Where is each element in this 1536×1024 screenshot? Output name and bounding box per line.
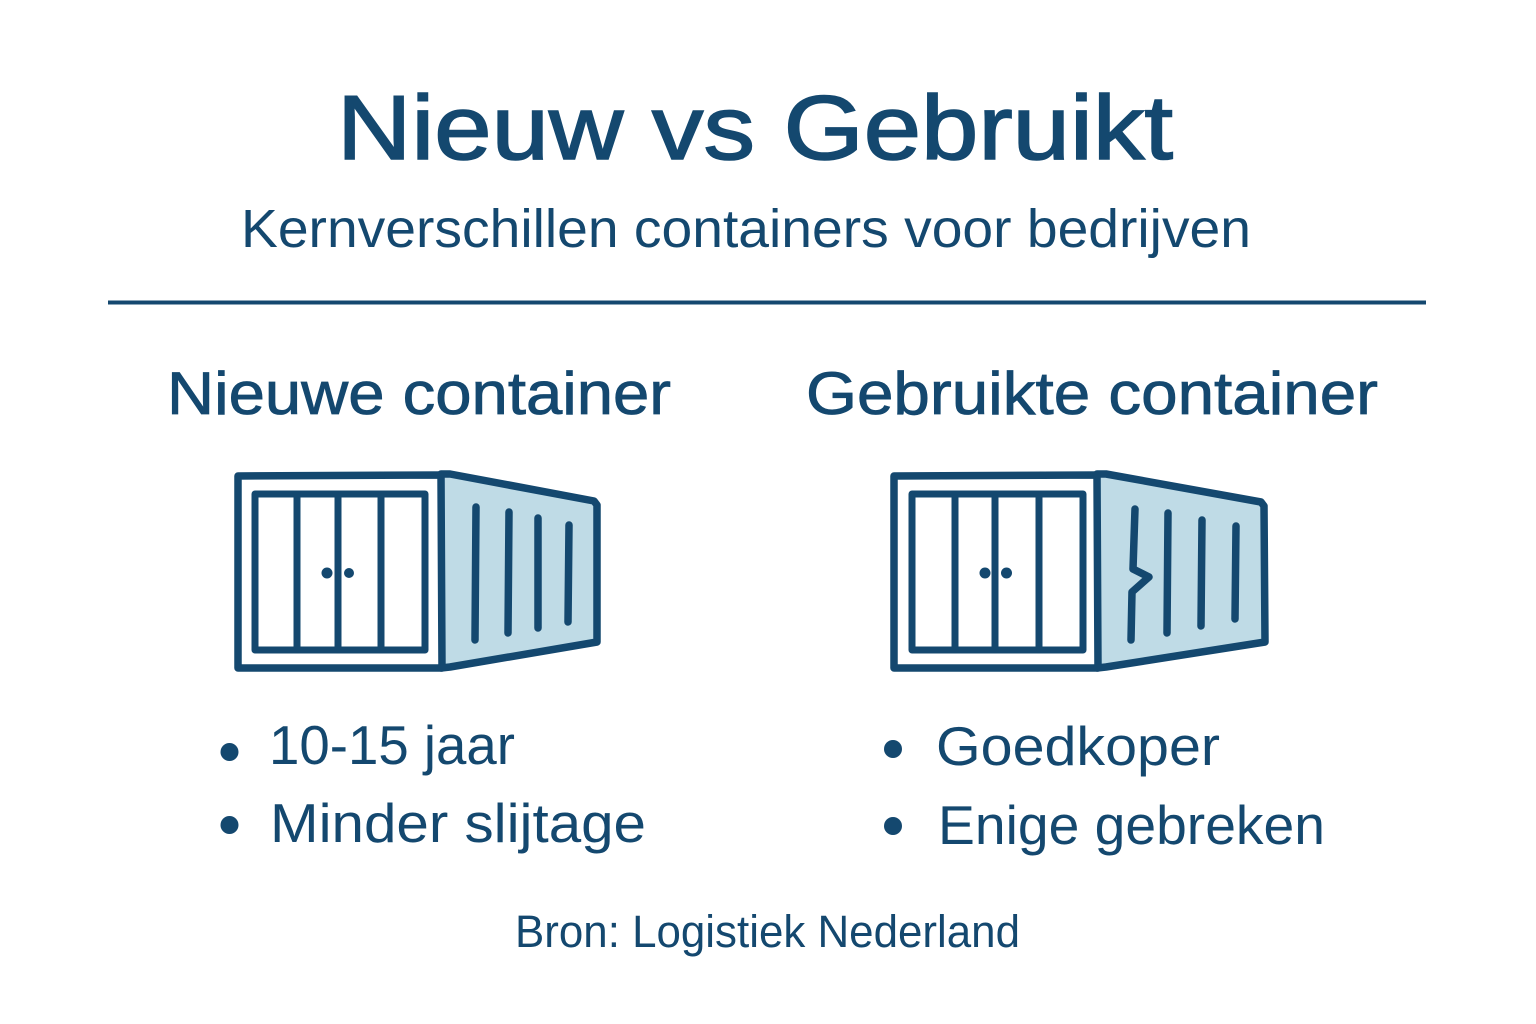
panel: nieuwe container [167,360,671,854]
icon: new container [238,474,597,668]
heading: gebruikte container: Gebruikte container [806,360,1378,427]
subtitle: Kernverschillen containers voor bedrijven [241,199,1251,259]
panel: gebruikte container [806,360,1378,856]
bullet list: gebruikte container: Goedkoper [936,715,1220,777]
icon: used container with dent [894,474,1265,668]
bullet list: nieuwe container: 10-15 jaar [269,714,515,776]
heading: nieuwe container: Nieuwe container [167,360,671,427]
bullet list: gebruikte container [884,715,1325,856]
bullet list: nieuwe container: Minder slijtage [270,792,646,854]
bullet list: nieuwe container [220,714,646,854]
bullet list: gebruikte container: Enige gebreken [938,794,1325,856]
source note: Bron: Logistiek Nederland [515,906,1020,957]
title: Nieuw vs Gebruikt [337,78,1173,179]
